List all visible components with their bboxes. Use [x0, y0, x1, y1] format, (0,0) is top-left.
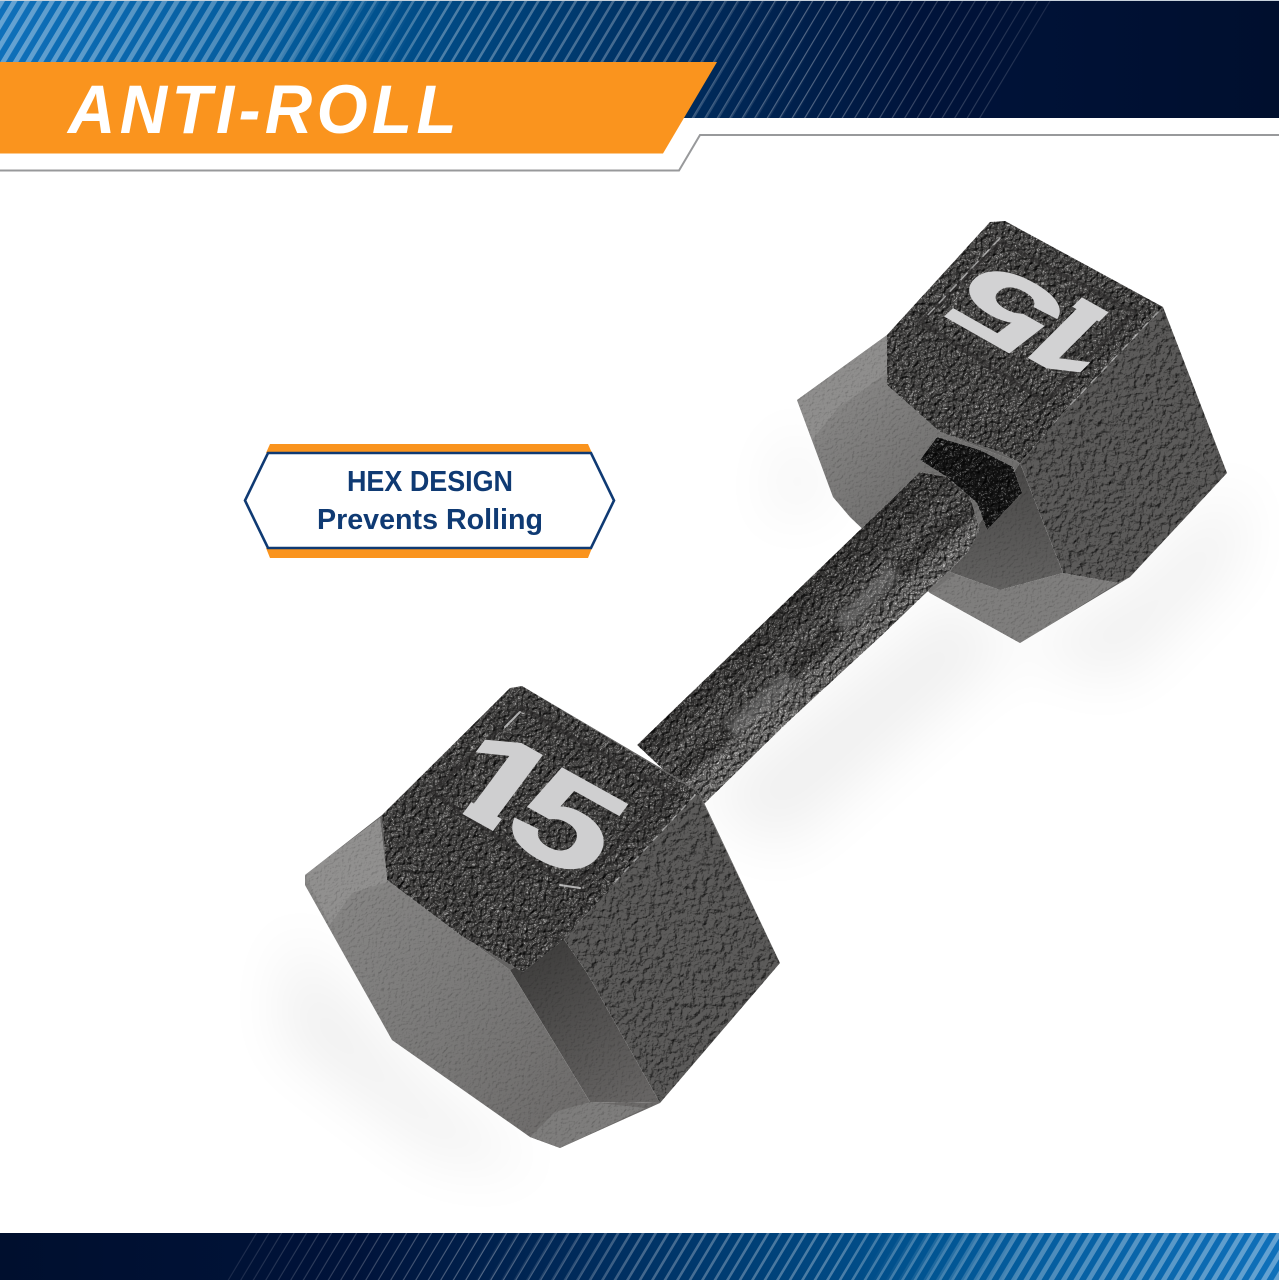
lower head gray facets: [305, 818, 660, 1148]
lower head frame grooves: [432, 708, 695, 888]
upper head frame grooves: [921, 238, 1158, 405]
upper head end face: [887, 221, 1163, 463]
lower weight number: [462, 740, 628, 870]
handle: [637, 472, 980, 806]
upper hex head: [797, 221, 1227, 643]
lower head side face: [563, 792, 780, 1103]
digit one: 1: [413, 701, 587, 866]
callout text line 1: HEX DESIGN: [347, 466, 513, 498]
upper head base silhouette: [797, 221, 1227, 643]
upper head glossy facet: [950, 463, 1063, 590]
dumbbell: [305, 221, 1227, 1148]
lower hex head: [305, 686, 780, 1148]
callout text line 2: Prevents Rolling: [317, 504, 543, 536]
title text: ANTI-ROLL: [66, 71, 457, 148]
digit one: 1: [986, 268, 1155, 404]
upper weight number: [944, 271, 1109, 372]
header band with diagonal stripes: [0, 0, 1279, 118]
upper head gray facets: [797, 335, 1117, 643]
header outline rule: [0, 135, 1279, 170]
handle highlights: [725, 566, 900, 737]
digit five: 5: [918, 243, 1092, 375]
upper head side face: [1020, 307, 1227, 583]
dumbbell shadows: [280, 420, 1240, 1170]
upper collar: [920, 437, 1022, 530]
callout: hex design: [245, 444, 614, 558]
lower head end face: [382, 686, 698, 972]
lower head glossy facet: [510, 938, 660, 1103]
lower head base silhouette: [305, 686, 780, 1148]
digit five: 5: [480, 740, 654, 905]
footer band with diagonal stripes: [0, 1233, 1279, 1280]
callout orange caps: [266, 444, 592, 558]
title banner: [0, 62, 717, 154]
callout hexagon outline: [245, 453, 614, 548]
